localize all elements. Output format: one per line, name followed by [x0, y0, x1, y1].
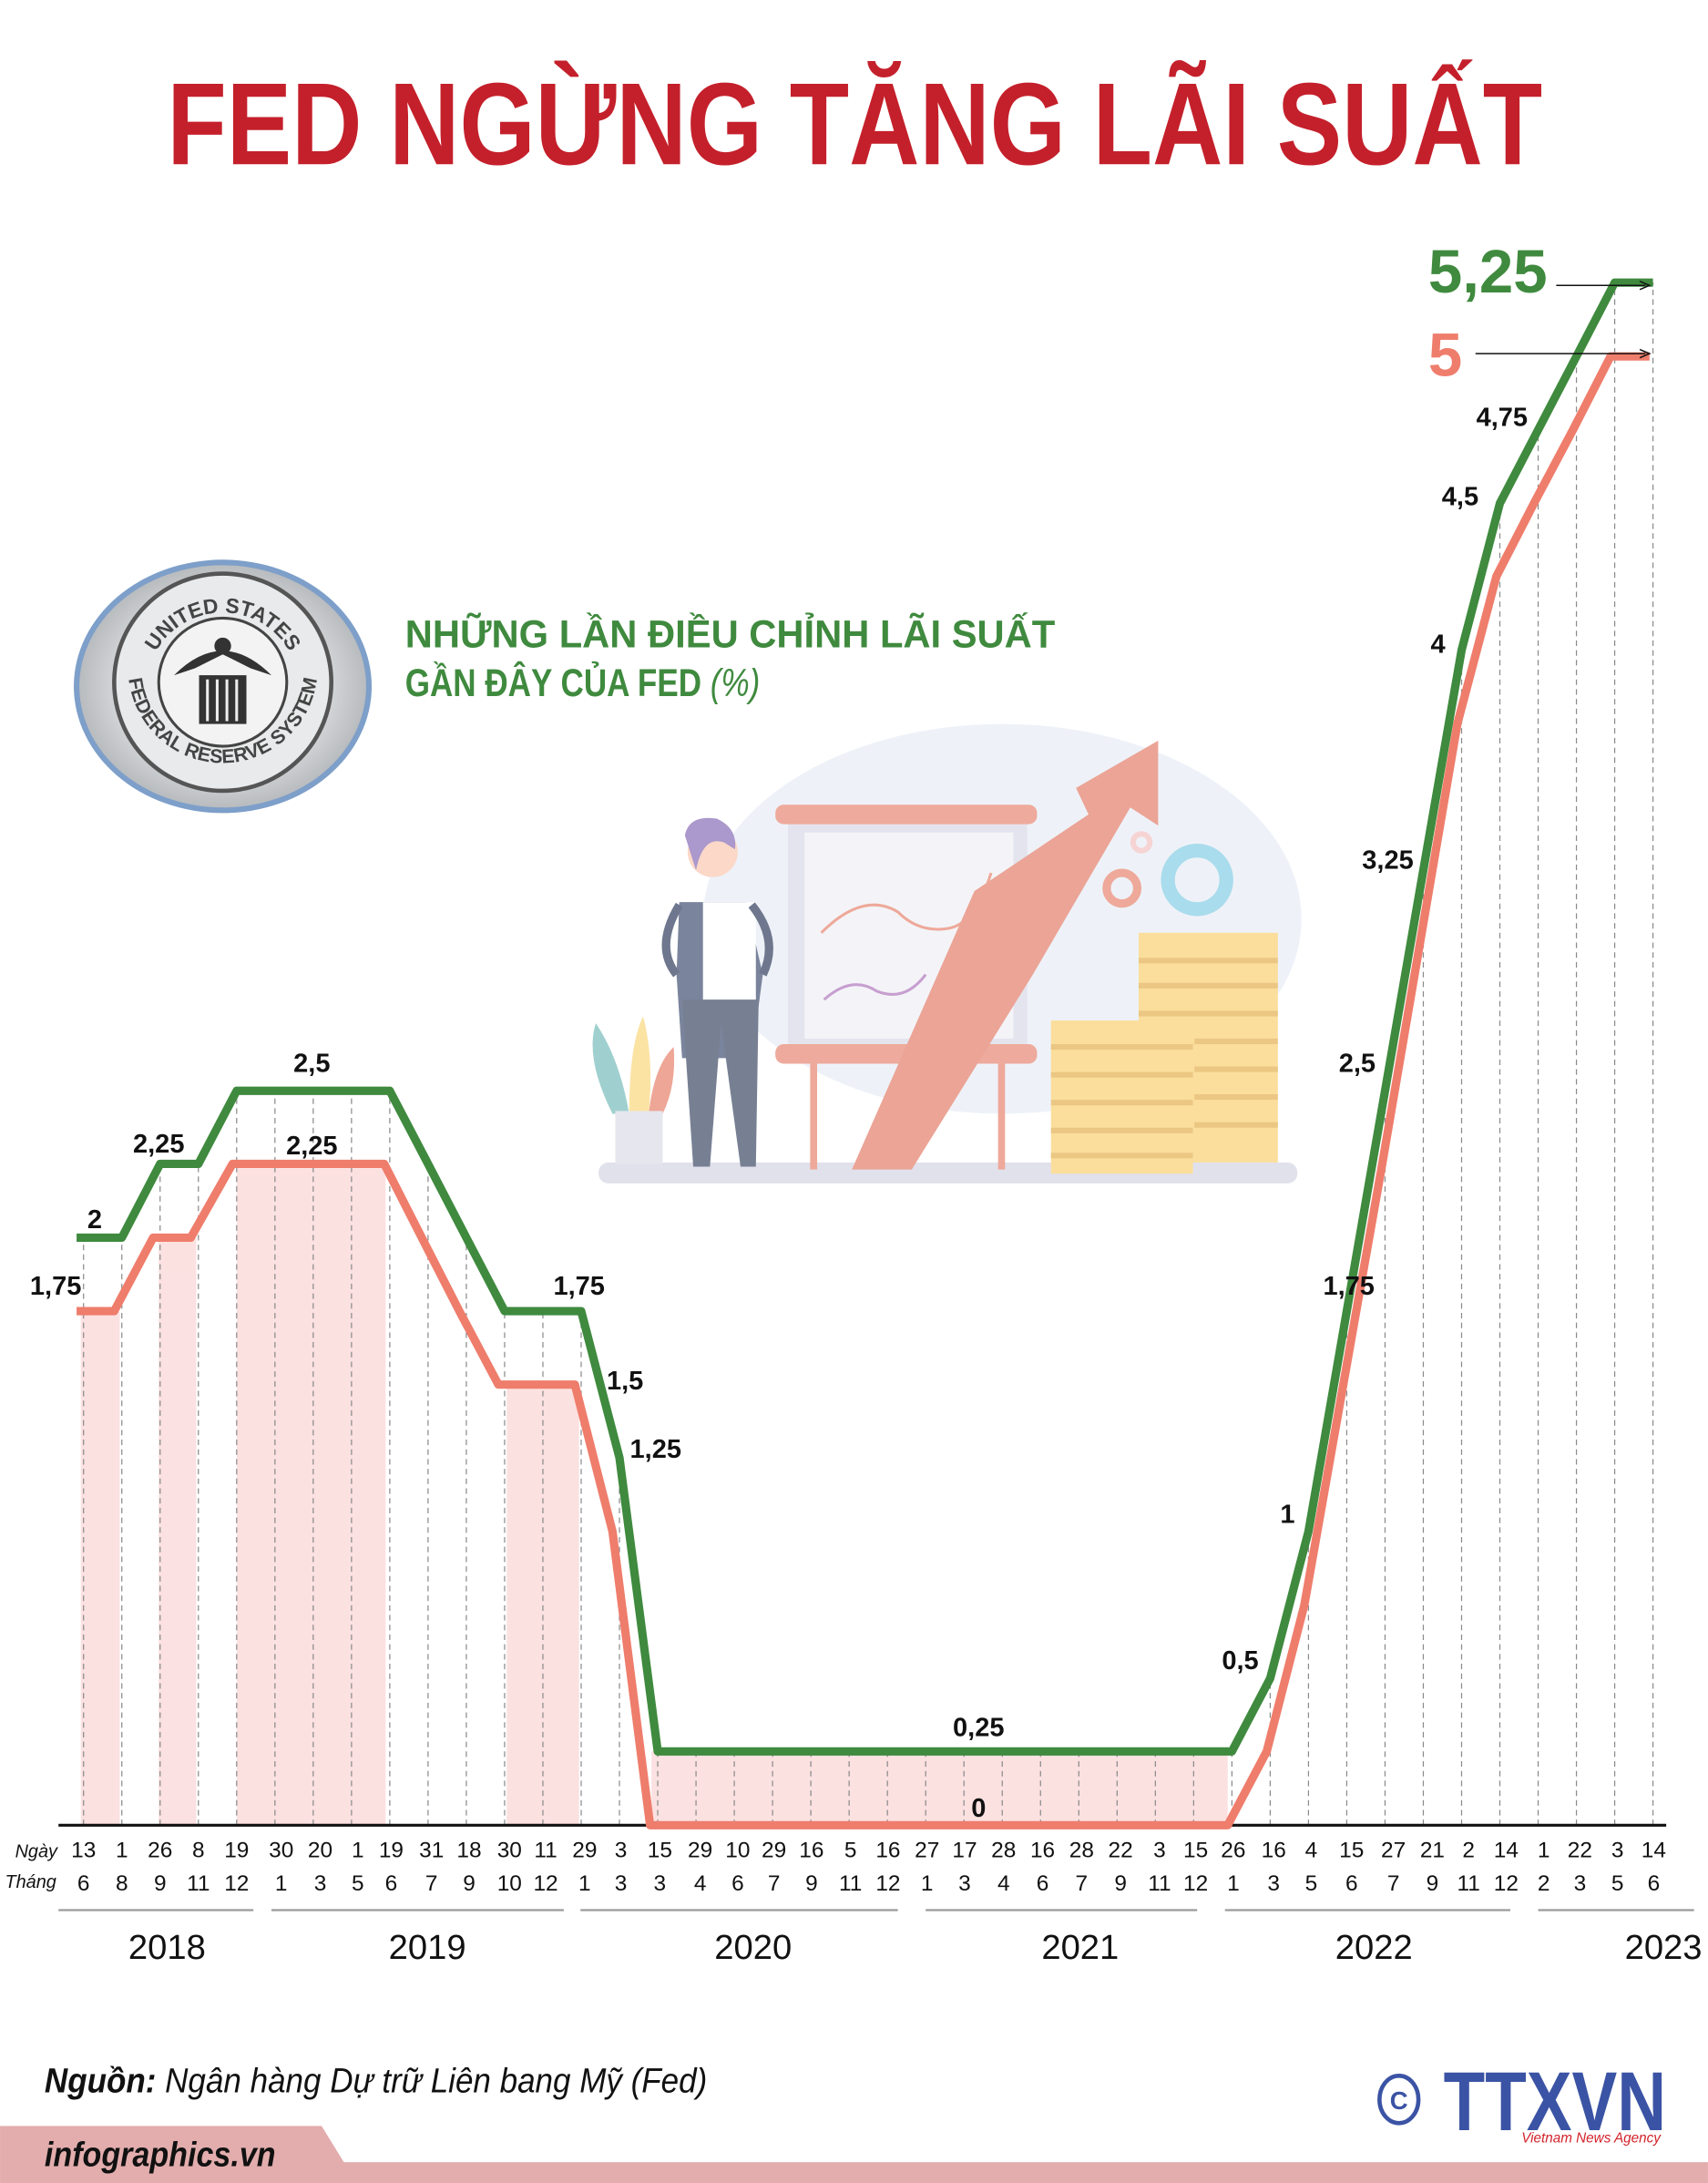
axis date labels: 12	[1183, 1871, 1208, 1896]
illustration: presenter with chart, arrow, coins	[593, 724, 1302, 1184]
axis date labels: 2	[1538, 1871, 1549, 1896]
axis date labels: 7	[768, 1871, 780, 1896]
icon: federal reserve seal: FEDERAL RESERVE SYSTEM	[128, 678, 317, 764]
axis date labels: 28	[1069, 1838, 1094, 1862]
axis date labels: 12	[224, 1871, 249, 1896]
year labels: 2021	[1041, 1928, 1119, 1967]
axis date labels: 15	[1339, 1838, 1364, 1862]
source note: Nguồn: Ngân hàng Dự trữ Liên bang Mỹ (Fed)	[45, 2062, 707, 2101]
axis date labels: 22	[1109, 1838, 1133, 1862]
logo: TTXVN: C	[1390, 2086, 1408, 2115]
value labels: 1	[1280, 1501, 1295, 1530]
axis date labels: 18	[456, 1838, 482, 1862]
axis date labels: 6	[731, 1871, 744, 1896]
axis date labels: 12	[875, 1871, 901, 1896]
axis date labels: 9	[1114, 1871, 1127, 1896]
axis date labels: 11	[1457, 1871, 1480, 1896]
axis date labels: 19	[224, 1838, 249, 1862]
value labels: 0,5	[1222, 1646, 1259, 1676]
year labels: 2022	[1335, 1928, 1413, 1967]
axis date labels: 7	[1076, 1871, 1088, 1896]
axis date labels: 4	[1305, 1838, 1317, 1862]
axis date labels: 27	[1381, 1838, 1406, 1862]
value labels: 2,5	[1339, 1050, 1376, 1079]
axis date labels: 1	[275, 1871, 287, 1896]
axis date labels: 6	[77, 1871, 90, 1896]
axis date labels: 14	[1494, 1838, 1519, 1862]
axis date labels: 28	[991, 1838, 1016, 1862]
axis date labels: 14	[1642, 1838, 1666, 1862]
highlight: 5,25 and 5: 5	[1428, 322, 1462, 390]
axis date labels: 6	[1037, 1871, 1048, 1896]
axis date labels: 12	[533, 1871, 558, 1896]
red line: lower bound	[77, 356, 1650, 1825]
axis date labels: 3	[615, 1838, 627, 1862]
axis date labels: 17	[952, 1838, 977, 1862]
axis date labels: 5	[1305, 1871, 1317, 1896]
arrow	[852, 741, 1158, 1170]
subtitle: NHỮNG LẦN ĐIỀU CHỈNH LÃI SUẤT	[405, 612, 1055, 657]
axis date labels: 16	[1262, 1838, 1286, 1862]
axis date labels: 8	[192, 1838, 205, 1862]
axis date labels: 4	[997, 1871, 1010, 1896]
subtitle	[405, 612, 1055, 705]
axis date labels: 11	[1148, 1871, 1171, 1896]
axis date labels: 20	[308, 1838, 332, 1862]
value labels: 1,5	[607, 1367, 643, 1396]
axis date labels: Ngày	[15, 1841, 58, 1861]
axis date labels: 31	[419, 1838, 444, 1862]
person	[688, 827, 738, 877]
year labels: 2019	[389, 1928, 466, 1967]
axis date labels: 1	[116, 1838, 128, 1862]
axis date labels: 4	[694, 1871, 706, 1896]
axis date labels: 5	[352, 1871, 364, 1896]
value labels: 2,5	[293, 1050, 330, 1079]
axis date labels: 1	[1538, 1838, 1549, 1862]
axis date labels: 1	[578, 1871, 591, 1896]
value labels	[30, 404, 1528, 1823]
year labels: 2020	[714, 1928, 792, 1967]
value labels: 1,75	[30, 1272, 81, 1301]
axis date labels: 3	[314, 1871, 326, 1896]
axis date labels: 6	[385, 1871, 397, 1896]
axis date labels: 1	[352, 1838, 364, 1862]
axis date labels: 7	[425, 1871, 438, 1896]
axis date labels: 13	[71, 1838, 96, 1862]
axis date labels: 3	[958, 1871, 971, 1896]
axis date labels: 3	[1574, 1871, 1586, 1896]
year labels: 2023	[1625, 1928, 1703, 1967]
axis date labels: 3	[1611, 1838, 1623, 1862]
axis date labels: 21	[1420, 1838, 1445, 1862]
axis date labels: 27	[915, 1838, 939, 1862]
value labels: 1,75	[553, 1272, 605, 1301]
logo: TTXVN: Vietnam News Agency	[1521, 2131, 1662, 2147]
value labels: 4,75	[1477, 404, 1528, 433]
highlight: 5,25 and 5	[1428, 238, 1650, 390]
axis date labels: 30	[269, 1838, 293, 1862]
axis date labels: 10	[497, 1871, 522, 1896]
axis date labels: 6	[1648, 1871, 1660, 1896]
axis date labels	[5, 1838, 1666, 1896]
year labels	[58, 1910, 1703, 1967]
value labels: 1,75	[1323, 1272, 1375, 1301]
axis date labels: 5	[844, 1838, 856, 1862]
axis date labels: 9	[463, 1871, 476, 1896]
axis date labels: 3	[1267, 1871, 1280, 1896]
axis date labels: 12	[1494, 1871, 1519, 1896]
value labels: 2,25	[133, 1130, 184, 1159]
website: infographics.vn	[45, 2136, 276, 2175]
value labels: 4	[1430, 630, 1446, 660]
baseline axis	[58, 1824, 1666, 1826]
axis date labels: 15	[1183, 1838, 1208, 1862]
value labels: 3,25	[1362, 846, 1414, 876]
highlight: 5,25 and 5: 5,25	[1428, 238, 1548, 306]
easel	[810, 1058, 817, 1170]
icon: federal reserve seal	[74, 559, 372, 813]
logo: TTXVN	[1379, 2055, 1666, 2148]
axis date labels: 26	[1221, 1838, 1245, 1862]
axis date labels: 7	[1387, 1871, 1399, 1896]
axis date labels: 3	[1153, 1838, 1166, 1862]
axis date labels: 29	[572, 1838, 597, 1862]
gears	[1107, 873, 1137, 904]
axis date labels: 16	[875, 1838, 901, 1862]
value labels: 0	[971, 1794, 986, 1823]
axis date labels: 11	[534, 1838, 557, 1862]
axis date labels: 11	[839, 1871, 862, 1896]
footer band	[0, 2126, 1708, 2183]
axis date labels: 15	[648, 1838, 672, 1862]
plant	[593, 1023, 629, 1113]
value labels: 2,25	[286, 1132, 338, 1161]
value labels: 0,25	[953, 1713, 1005, 1742]
dashed guide lines	[84, 282, 1653, 1825]
axis date labels: 5	[1611, 1871, 1623, 1896]
axis date labels: 10	[725, 1838, 751, 1862]
axis date labels: 2	[1462, 1838, 1475, 1862]
axis date labels: 16	[799, 1838, 823, 1862]
axis date labels: 16	[1030, 1838, 1055, 1862]
axis date labels: 9	[1427, 1871, 1438, 1896]
value labels: 1,25	[630, 1435, 681, 1464]
axis date labels: 29	[762, 1838, 786, 1862]
axis date labels: 3	[615, 1871, 627, 1896]
axis date labels: 3	[654, 1871, 666, 1896]
value labels: 4,5	[1442, 483, 1478, 512]
year labels: 2018	[128, 1928, 206, 1967]
axis date labels: 11	[187, 1871, 210, 1896]
axis date labels: 9	[805, 1871, 818, 1896]
axis date labels: 1	[921, 1871, 934, 1896]
value labels: 2	[87, 1205, 102, 1235]
axis date labels: 8	[116, 1871, 128, 1896]
axis date labels: 30	[497, 1838, 522, 1862]
axis date labels: 29	[688, 1838, 712, 1862]
axis date labels: Tháng	[5, 1872, 56, 1892]
green line: upper bound	[77, 282, 1653, 1751]
axis date labels: 1	[1227, 1871, 1240, 1896]
pink shaded regions	[81, 1163, 1228, 1825]
axis date labels: 19	[379, 1838, 404, 1862]
axis date labels: 22	[1568, 1838, 1592, 1862]
axis date labels: 9	[154, 1871, 167, 1896]
coins	[1051, 1020, 1193, 1173]
axis date labels: 26	[148, 1838, 172, 1862]
axis date labels: 6	[1345, 1871, 1358, 1896]
icon: federal reserve seal: UNITED STATES	[144, 598, 300, 650]
subtitle: GẦN ĐÂY CỦA FED (%)	[405, 661, 760, 705]
